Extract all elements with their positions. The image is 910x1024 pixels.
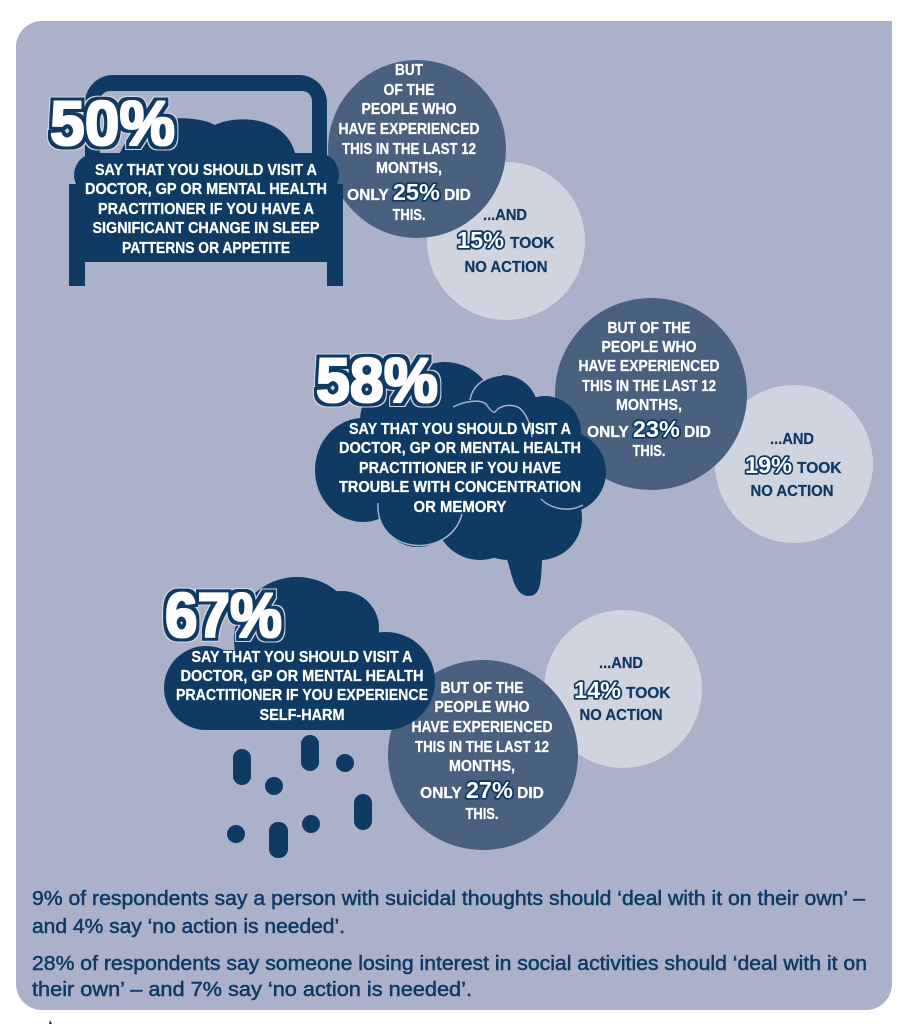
text: bed statement bbox=[85, 162, 327, 257]
bubble: 14% took no action: ...AND bbox=[599, 655, 643, 672]
section: sleep and appetite bbox=[50, 60, 585, 320]
text: cloud statement: SAY THAT YOU SHOULD VISIT A bbox=[192, 649, 412, 666]
heading: 50%: 50% bbox=[50, 89, 175, 159]
cropped mark at page bottom bbox=[49, 1020, 52, 1024]
text: social activities note: 28% of respondents say someone losing interest in social activities should ‘deal with it on bbox=[32, 953, 867, 975]
text: only 23% did this: THIS IN THE LAST 12 bbox=[582, 378, 716, 395]
bubble: 19% took no action: NO ACTION bbox=[750, 483, 834, 500]
bubble: 19% took no action: ...AND bbox=[770, 431, 814, 448]
bubble: 15% took no action: NO ACTION bbox=[464, 259, 548, 276]
text: social activities note: their own’ – and 7% say ‘no action is needed’. bbox=[32, 979, 472, 1001]
text: bed statement: PATTERNS OR APPETITE bbox=[122, 240, 290, 257]
bubble: 15% took no action: TOOK bbox=[510, 235, 555, 252]
text: only 23% did this: BUT OF THE bbox=[608, 320, 690, 337]
bubble: only 25% did this: THIS IN THE LAST 12 bbox=[342, 141, 476, 158]
bubble: only 27% did this: BUT OF THE bbox=[440, 680, 524, 697]
bubble: 15% took no action bbox=[427, 162, 585, 320]
section: concentration and memory bbox=[315, 298, 873, 596]
bubble: only 25% did this: ONLY 25% DID bbox=[347, 179, 471, 205]
icon: bed bbox=[69, 75, 343, 286]
bubble: only 27% did this: THIS IN THE LAST 12 bbox=[415, 739, 549, 756]
bubble: only 27% did this: PEOPLE WHO bbox=[434, 699, 530, 716]
text: brain statement: TROUBLE WITH CONCENTRATION bbox=[339, 479, 581, 496]
heading: 58%: 58% bbox=[316, 346, 438, 416]
text: suicidal thoughts note: 9% of respondents say a person with suicidal thoughts should ‘deal with it on their own’ – bbox=[32, 888, 866, 910]
bubble: 14% took no action: NO ACTION bbox=[580, 707, 662, 724]
bubble: 19% took no action: 19% bbox=[745, 452, 792, 478]
text: only 23% did this: MONTHS, bbox=[616, 397, 682, 414]
bubble: only 25% did this: PEOPLE WHO bbox=[362, 101, 456, 118]
text: bed statement: SAY THAT YOU SHOULD VISIT A bbox=[95, 162, 317, 179]
bubble: 14% took no action bbox=[544, 610, 702, 768]
text: social activities note bbox=[32, 953, 867, 1001]
icon: brain bbox=[315, 362, 606, 596]
text: bed statement: SIGNIFICANT CHANGE IN SLEEP bbox=[92, 220, 320, 237]
text: bed statement: PRACTITIONER IF YOU HAVE A bbox=[98, 201, 314, 218]
text: brain statement bbox=[339, 421, 581, 516]
rain drops bbox=[227, 735, 372, 858]
heading: 67%: 67% bbox=[165, 581, 282, 651]
text: suicidal thoughts note: and 4% say ‘no action is needed’. bbox=[32, 916, 345, 938]
cloud body bbox=[164, 577, 435, 730]
text: brain statement: SAY THAT YOU SHOULD VISIT A bbox=[349, 421, 571, 438]
bubble: 15% took no action: 15% bbox=[457, 227, 504, 253]
text: cloud statement: DOCTOR, GP OR MENTAL HEALTH bbox=[180, 668, 424, 685]
bubble: 19% took no action bbox=[715, 385, 873, 543]
bubble: 14% took no action: 14% bbox=[574, 677, 621, 703]
bubble: only 27% did this: MONTHS, bbox=[449, 758, 515, 775]
bubble: only 27% did this: ONLY 27% DID bbox=[420, 777, 544, 803]
text: cloud statement: SELF-HARM bbox=[260, 707, 344, 724]
bubble: 15% took no action: ...AND bbox=[483, 207, 527, 224]
text: only 23% did this bbox=[578, 320, 720, 460]
text: cloud statement bbox=[176, 649, 428, 724]
bubble: only 25% did this: THIS. bbox=[392, 207, 426, 224]
bubble: only 25% did this: MONTHS, bbox=[376, 160, 442, 177]
text: only 23% did this: PEOPLE WHO bbox=[602, 339, 696, 356]
bubble: 14% took no action: TOOK bbox=[626, 685, 671, 702]
bubble: only 25% did this: OF THE bbox=[384, 82, 434, 99]
text: only 23% did this: ONLY 23% DID bbox=[587, 416, 711, 442]
text: only 23% did this: THIS. bbox=[632, 443, 666, 460]
text: cloud statement: PRACTITIONER IF YOU EXPERIENCE bbox=[176, 687, 428, 704]
bubble: dark circle 23% bbox=[555, 298, 747, 490]
bubble: only 25% did this: HAVE EXPERIENCED bbox=[338, 121, 480, 138]
text: only 23% did this: HAVE EXPERIENCED bbox=[578, 358, 720, 375]
text: suicidal thoughts note bbox=[32, 888, 866, 938]
text: brain statement: OR MEMORY bbox=[414, 499, 507, 516]
text: brain statement: DOCTOR, GP OR MENTAL HEALTH bbox=[339, 440, 581, 457]
section: self-harm bbox=[164, 577, 702, 858]
bubble: 19% took no action: TOOK bbox=[797, 460, 842, 477]
bubble: only 27% did this: HAVE EXPERIENCED bbox=[412, 719, 552, 736]
bubble: only 27% did this: THIS. bbox=[466, 806, 498, 823]
bubble: only 27% did this bbox=[388, 660, 578, 850]
text: brain statement: PRACTITIONER IF YOU HAVE bbox=[359, 460, 561, 477]
bubble: only 25% did this: BUT bbox=[395, 62, 423, 79]
bubble: only 25% did this bbox=[328, 60, 506, 238]
icon: rain cloud bbox=[164, 577, 435, 858]
text: bed statement: DOCTOR, GP OR MENTAL HEALTH bbox=[85, 181, 327, 198]
